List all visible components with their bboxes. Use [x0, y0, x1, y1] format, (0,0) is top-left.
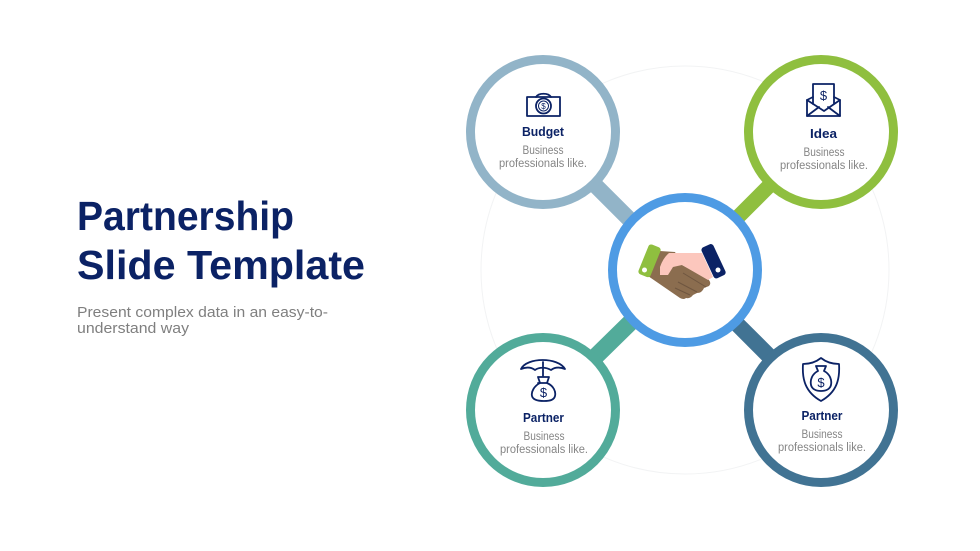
icon: camera-shaped money case: $: [541, 102, 546, 111]
budget description: [499, 145, 587, 170]
slide subtitle: Present complex data in an easy-to-: [77, 304, 328, 321]
icon: umbrella over money bag: [521, 360, 565, 401]
slide subtitle: understand way: [77, 320, 190, 337]
icon: shield with money bag: $: [817, 375, 825, 390]
budget description: professionals like.: [499, 158, 587, 170]
slide title: Slide Template: [77, 242, 365, 288]
idea description: [780, 147, 868, 172]
icon: camera-shaped money case: [527, 94, 560, 116]
idea label: Idea: [810, 127, 838, 141]
partner right description: [778, 429, 866, 454]
node: budget: [470, 60, 616, 204]
node: idea: [748, 60, 894, 204]
icon: shield with money bag: [803, 358, 839, 401]
icon: umbrella over money bag: $: [540, 385, 548, 400]
partner left label: Partner: [523, 411, 564, 425]
node: partner right: [748, 338, 894, 482]
node: partner left: [470, 338, 616, 482]
partner right description: professionals like.: [778, 442, 866, 454]
partner left description: professionals like.: [500, 444, 588, 456]
budget description: Business: [522, 145, 564, 157]
slide subtitle: [77, 304, 328, 337]
budget label: Budget: [522, 125, 565, 139]
slide title: [77, 193, 365, 288]
idea description: Business: [804, 147, 845, 159]
partner left description: Business: [524, 431, 565, 443]
faint background ring: [481, 66, 889, 474]
slide title: Partnership: [77, 193, 294, 239]
partner right label: Partner: [802, 409, 843, 423]
icon: envelope with dollar letter: $: [820, 88, 828, 103]
connector: partner left: [590, 313, 640, 362]
connector: budget: [590, 180, 640, 230]
connector: idea: [730, 180, 775, 225]
icon: envelope with dollar letter: [807, 84, 840, 116]
connector: partner right: [738, 325, 778, 365]
partner right description: Business: [802, 429, 843, 441]
partner left description: [500, 431, 588, 456]
idea description: professionals like.: [780, 160, 868, 172]
center node: handshake: [612, 198, 758, 342]
icon: handshake: [638, 243, 727, 299]
